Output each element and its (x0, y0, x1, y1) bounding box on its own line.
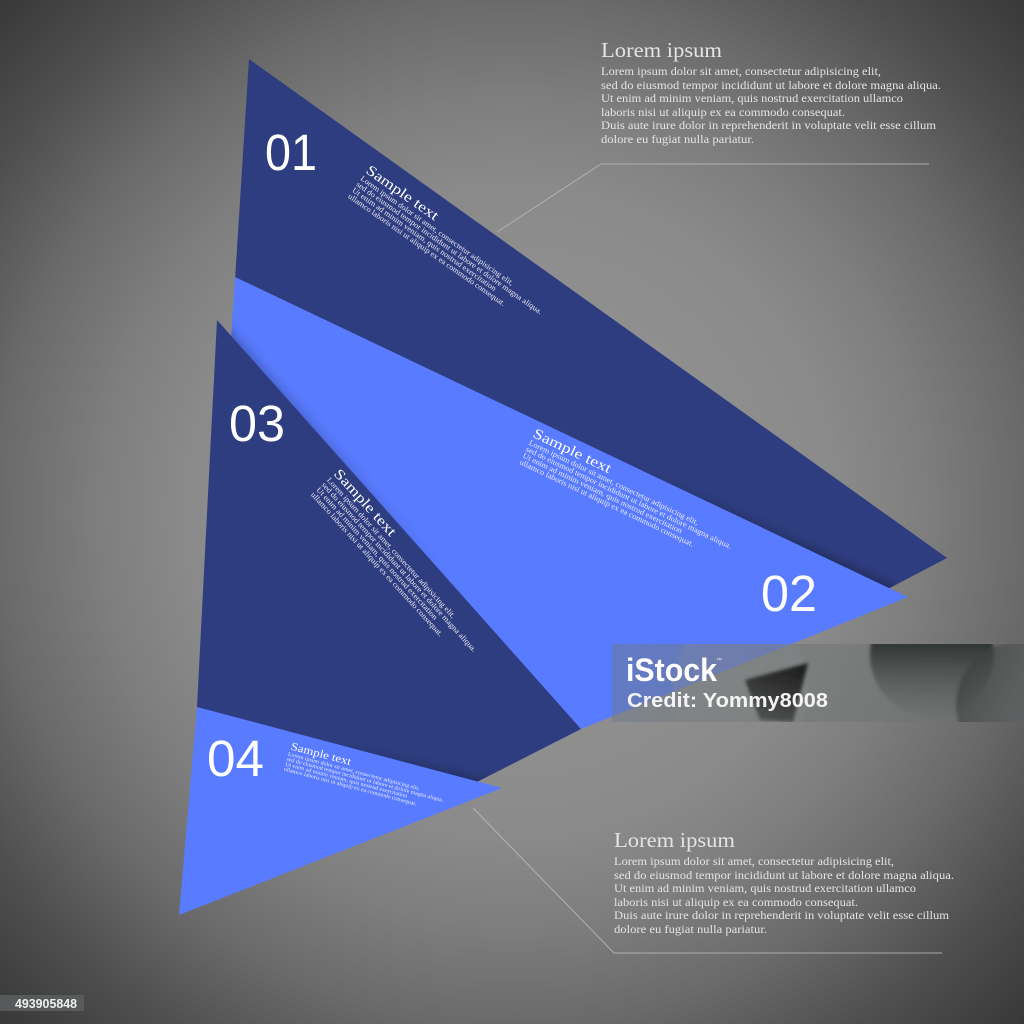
panel: segment 04 (179, 707, 502, 915)
text block: segment 01 (346, 162, 556, 328)
connector line: top callout (497, 164, 929, 232)
text block: segment 01: Lorem ipsum dolor sit amet, consectetur adipisicing elit, (359, 174, 515, 287)
text block: segment 02 (518, 426, 742, 564)
text block: segment 01: Ut enim ad minim veniam, quis nostrud exercitation (350, 186, 498, 293)
text block: segment 02: sed do eiusmod tempor incididunt ut labore et dolore magna aliqua. (524, 445, 733, 551)
text block: segment 03: Lorem ipsum dolor sit amet, consectetur adipisicing elit, (325, 476, 458, 620)
callout: top text: Lorem ipsum (601, 38, 722, 62)
text block: segment 03: sed do eiusmod tempor incididunt ut labore et dolore magna aliqua. (320, 480, 479, 654)
text block: segment 02: Sample text (530, 426, 614, 477)
text block: segment 04: Ut enim ad minim veniam, quis nostrud exercitation (284, 762, 408, 800)
callout: top text: Duis aute irure dolor in reprehenderit in voluptate velit esse cillum (601, 118, 937, 132)
text block: segment 02: Lorem ipsum dolor sit amet, consectetur adipisicing elit, (527, 438, 700, 527)
text block: segment 04: Lorem ipsum dolor sit amet, consectetur adipisicing elit, (287, 752, 421, 792)
text block: segment 01: Sample text (363, 162, 442, 224)
watermark logo: iStock (626, 652, 717, 688)
callout: top text: laboris nisi ut aliquip ex ea commodo consequat. (601, 105, 845, 119)
text block: segment 01: sed do eiusmod tempor incididunt ut labore et dolore magna aliqua. (355, 180, 544, 316)
connector line: bottom callout (473, 808, 942, 953)
callout: top text: Ut enim ad minim veniam, quis nostrud exercitation ullamco (601, 91, 903, 105)
callout: top text: dolore eu fugiat nulla pariatur. (601, 132, 754, 146)
callout: bottom text: sed do eiusmod tempor incididunt ut labore et dolore magna aliqua. (614, 868, 954, 882)
callout: bottom text (614, 828, 954, 936)
text block: segment 03 (309, 466, 494, 663)
number 01: 01 (265, 124, 317, 181)
callout: bottom text: Ut enim ad minim veniam, quis nostrud exercitation ullamco (614, 881, 916, 895)
callout: bottom text: laboris nisi ut aliquip ex ea commodo consequat. (614, 895, 858, 909)
callout: top text: sed do eiusmod tempor incididunt ut labore et dolore magna aliqua. (601, 78, 941, 92)
image id tag: 493905848 (15, 996, 77, 1011)
callout: top text (601, 38, 941, 146)
number 04: 04 (207, 730, 264, 787)
text block: segment 03: ullamco laboris nisi ut aliquip ex ea commodo consequat. (309, 490, 445, 638)
callout: top text: Lorem ipsum dolor sit amet, consectetur adipisicing elit, (601, 64, 881, 78)
text block: segment 01: ullamco laboris nisi ut aliquip ex ea commodo consequat. (346, 192, 507, 308)
text block: segment 04: ullamco laboris nisi ut aliquip ex ea commodo consequat. (283, 767, 418, 808)
watermark credit: Credit: Yommy8008 (627, 690, 828, 712)
callout: bottom text: Duis aute irure dolor in reprehenderit in voluptate velit esse cillum (614, 908, 950, 922)
callout: bottom text: dolore eu fugiat nulla pariatur. (614, 922, 767, 936)
panel: segment 03 (190, 320, 581, 800)
panel: segment 02 (200, 277, 908, 745)
number 03: 03 (229, 395, 285, 452)
callout: bottom text: Lorem ipsum (614, 828, 735, 852)
text block: segment 02: ullamco laboris nisi ut aliquip ex ea commodo consequat. (518, 458, 695, 549)
text block: segment 04: sed do eiusmod tempor incididunt ut labore et dolore magna aliqua. (286, 757, 445, 804)
text block: segment 03: Ut enim ad minim veniam, quis nostrud exercitation (314, 485, 440, 622)
text block: segment 03: Sample text (330, 466, 399, 540)
text block: segment 04 (283, 740, 449, 814)
callout: bottom text: Lorem ipsum dolor sit amet, consectetur adipisicing elit, (614, 854, 894, 868)
watermark banner (612, 644, 1024, 722)
watermark trademark: ™ (716, 657, 722, 664)
text block: segment 04: Sample text (289, 741, 352, 768)
number 02: 02 (761, 565, 817, 622)
panel: segment 01 (235, 59, 947, 606)
text block: segment 02: Ut enim ad minim veniam, quis nostrud exercitation (521, 451, 684, 535)
